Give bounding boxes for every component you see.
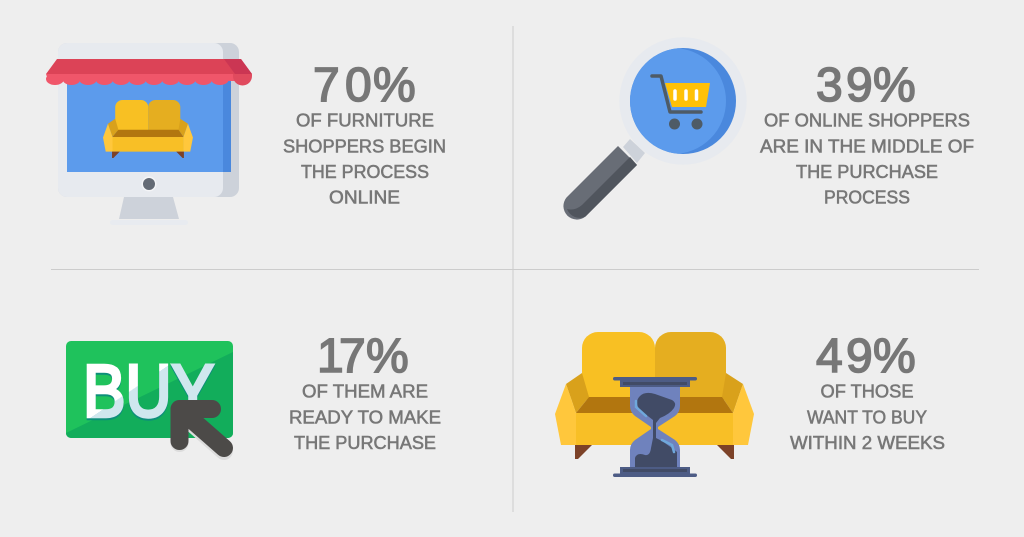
stat: 70% of furniture shoppers: 70% (313, 59, 416, 112)
icon: online storefront monitor (46, 43, 252, 225)
stat: 17% ready to make the purchase: OF THEM ARE (302, 382, 428, 402)
stat: 49% want to buy within 2 weeks: WITHIN 2 WEEKS (790, 433, 945, 453)
icon: sofa with hourglass (555, 332, 754, 477)
stat: 49% want to buy within 2 weeks: WANT TO BUY (807, 408, 927, 428)
stat: 70% of furniture shoppers: SHOPPERS BEGIN (283, 136, 446, 156)
icon: buy button with cursor: BUY (83, 352, 214, 434)
stat: 39% of online shoppers: PROCESS (824, 188, 910, 208)
stat: 17% ready to make the purchase (289, 330, 441, 453)
stat: 70% of furniture shoppers (283, 59, 446, 208)
stat: 39% of online shoppers: ARE IN THE MIDDLE OF (760, 136, 974, 156)
stat: 39% of online shoppers: OF ONLINE SHOPPERS (764, 110, 970, 130)
stat: 17% ready to make the purchase: READY TO MAKE (289, 408, 441, 428)
stat: 70% of furniture shoppers: ONLINE (329, 188, 400, 208)
icon: buy button with cursor (66, 341, 233, 451)
stat: 17% ready to make the purchase: 17% (317, 330, 409, 383)
stat: 49% want to buy within 2 weeks (790, 330, 945, 453)
stat: 39% of online shoppers: THE PURCHASE (796, 162, 938, 182)
stat: 49% want to buy within 2 weeks: 49% (816, 330, 916, 383)
stat: 70% of furniture shoppers: THE PROCESS (301, 162, 429, 182)
icon: buy button with cursor: BUY (83, 350, 214, 432)
stat: 39% of online shoppers: 39% (816, 59, 916, 112)
stat: 49% want to buy within 2 weeks: OF THOSE (820, 382, 914, 402)
icon: magnifying glass with shopping cart (563, 48, 736, 220)
stat: 70% of furniture shoppers: OF FURNITURE (296, 110, 434, 130)
stat: 17% ready to make the purchase: THE PURCHASE (294, 433, 436, 453)
stat: 39% of online shoppers (760, 59, 974, 208)
